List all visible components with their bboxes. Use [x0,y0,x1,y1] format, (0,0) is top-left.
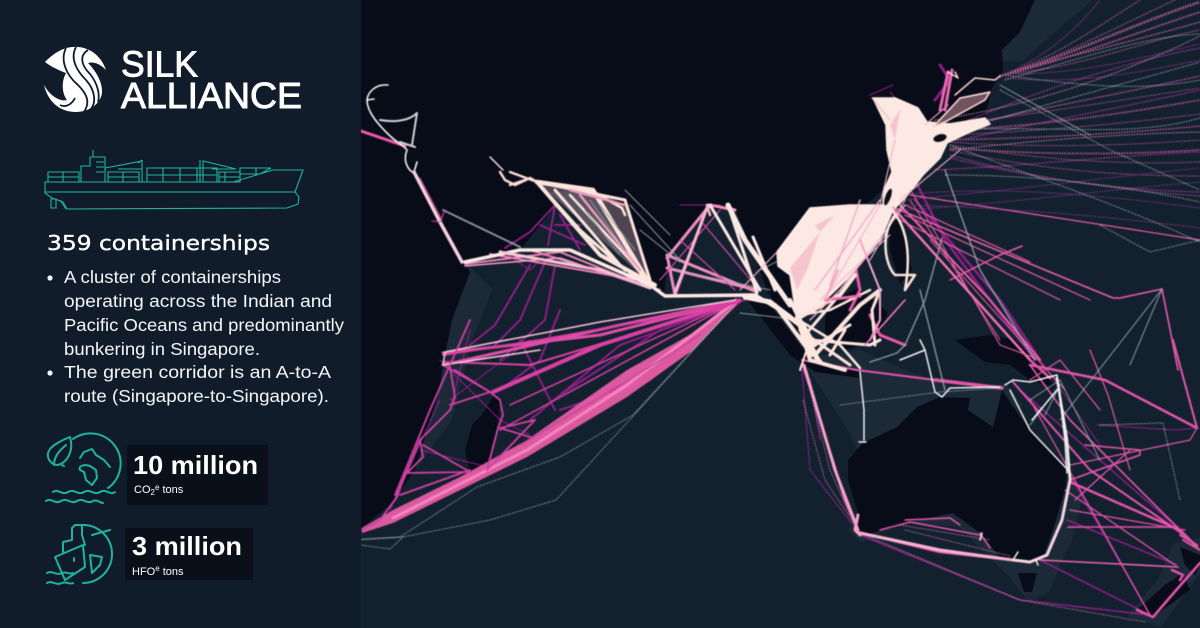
fan from East China Sea [900,36,1200,252]
land: Philippines [888,215,912,284]
routes: white trunk lines [367,85,818,360]
stat: 3 million HFOe tons [47,525,253,584]
hole: Taiwan [882,188,894,206]
logo wordmark: SILK [121,44,198,84]
stat: 10 million CO2e tons: tons [159,484,184,496]
land: Tasmania [1018,573,1037,592]
logo: Silk Alliance [44,44,302,116]
land: Madagascar [465,395,500,472]
value box [127,445,268,505]
route: Philippines and Borneo arcs [790,200,1030,370]
land: Australia [848,390,1067,562]
bullet 2 [47,362,332,406]
stat: 3 million HFOe tons: e [155,564,160,573]
icon: globe with ship [47,525,112,584]
bullet 1: operating across the Indian and [64,291,332,311]
route: Malacca Strait [745,297,818,360]
routes: Indian Ocean fan [362,298,740,533]
stat: 10 million CO2e tons: e [155,483,160,492]
stat: 10 million CO2e tons [46,433,268,505]
stat: 10 million CO2e tons: 10 million [133,450,258,480]
icon: container ship [45,150,303,209]
grey dotted Indian Ocean and Australia routes [360,305,1180,622]
routes: faint magenta web [390,65,1197,615]
left info panel [0,0,361,628]
route: Arabian fan [537,182,655,285]
route: East Asia congestion [740,70,1030,370]
routes: pink bundles [361,131,1200,617]
icon: globe with leaf [46,433,121,503]
land: New Zealand [1137,573,1190,617]
route: Bay of Bengal [728,205,790,305]
stat: 3 million HFOe tons: 3 million [132,531,242,561]
stat: 3 million HFOe tons: HFO [132,566,155,578]
stat: 10 million CO2e tons: CO [134,484,150,496]
route: Gulf of Aden trunk [465,250,790,316]
land: Borneo and Sulawesi [825,288,888,350]
route: northern Australia and east coast [804,340,1070,565]
routes: Pacific fan, dotted [360,0,1200,622]
route: Persian Gulf [490,157,537,185]
land: Africa and Eurasia [361,0,1035,528]
hole: Kyushu strait [932,132,948,144]
routes: east Africa coast [362,320,535,530]
route: Japan inland sea [933,70,1000,127]
icon: silk swirl [44,47,106,112]
routes: Arabian Sea and Bay of Bengal [465,250,660,290]
routes: pink transpacific trunks [850,175,1200,390]
stat: 10 million CO2e tons: 2 [150,488,156,497]
route: Red Sea [414,172,462,262]
bullet 1: Pacific Oceans and predominantly [64,315,344,335]
value box [125,528,253,580]
bullet list [47,267,344,406]
bullet 2: The green corridor is an A-to-A [64,362,332,382]
bullet 2: route (Singapore-to-Singapore). [64,386,329,406]
bullet 1 [47,267,344,359]
routes network [360,0,1200,622]
bullet 1: A cluster of containerships [64,267,281,287]
route: Mediterranean and Suez [367,85,417,172]
fan from Japan [1000,0,1200,86]
routes: Australia and Pacific pink [802,340,1200,617]
bullet 1: bunkering in Singapore. [64,339,260,359]
routes: thin grey solid [443,85,1162,460]
land: New Guinea [955,335,1055,388]
logo: Silk Alliance: ALLIANCE [121,75,302,116]
continental shelves [361,0,1200,625]
heading: 359 containerships: 359 containerships [47,231,270,255]
land masses [361,0,1200,617]
land: Sumatra and Java [745,297,860,378]
stat: 3 million HFOe tons: tons [160,566,184,578]
